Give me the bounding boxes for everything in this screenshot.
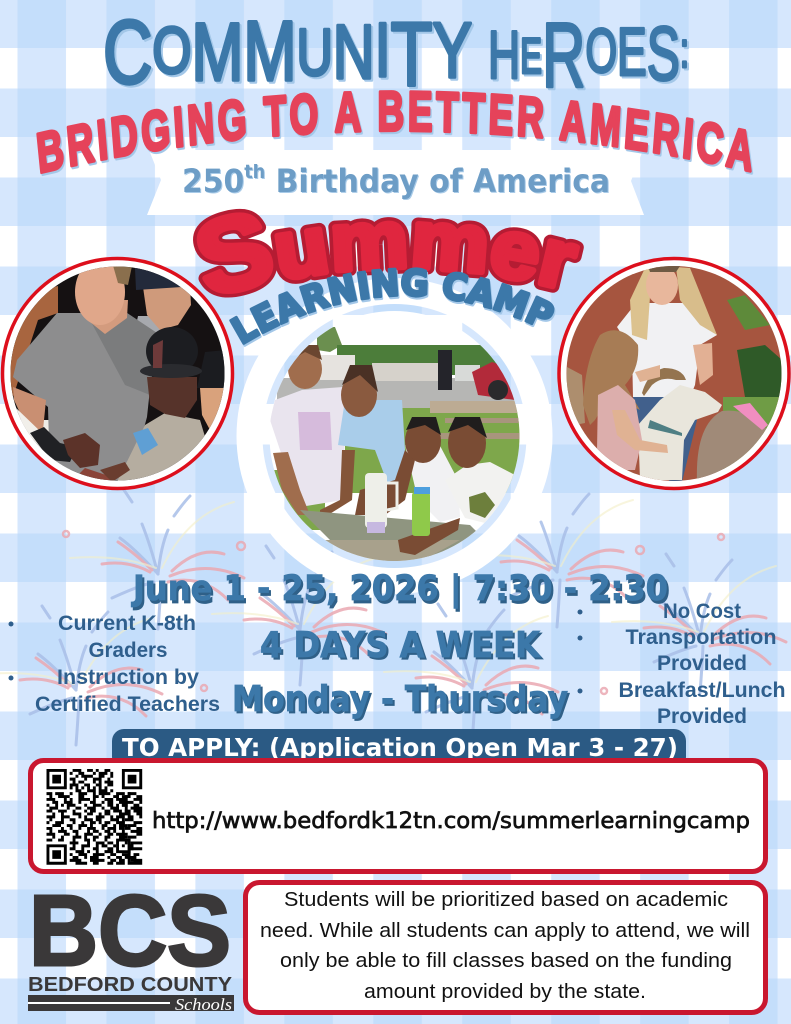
main title: Community Heroes: O: [585, 17, 617, 86]
prioritization note: amount provided by the state.: [364, 980, 646, 1003]
url text: http://www.bedfordk12tn.com/summerlearningcamp: [152, 809, 750, 834]
photo: four children at picnic table: [265, 305, 525, 570]
date and time: June 1 - 25, 2026 | 7:30 - 2:30: [131, 569, 668, 609]
main title: Community Heroes: [103, 3, 689, 107]
QR code: [46, 769, 142, 865]
main title: Community Heroes: R: [542, 5, 585, 107]
left bullet list: Certified Teachers: [35, 693, 220, 716]
main title: Community Heroes: S: [647, 12, 680, 97]
days of week: Monday - Thursday: [232, 679, 568, 720]
heading: Summer: Summer: [196, 212, 580, 294]
ribbon text: 250th Birthday of America: th: [244, 161, 265, 183]
BCS logo: BCS: [29, 875, 231, 987]
white ring behind center photo: [236, 278, 552, 594]
left bullet list: Current K-8th: [58, 612, 196, 635]
right bullet list: Provided: [657, 705, 747, 728]
main title: Community Heroes: N: [333, 10, 375, 95]
ribbon text: 250th Birthday of America: 250: [182, 162, 249, 200]
main title: Community Heroes: E: [520, 28, 542, 84]
prioritization note: [246, 882, 766, 1012]
white ribbon banner: [147, 150, 644, 215]
main title: Community Heroes: I: [375, 8, 391, 93]
left bullet list: Graders: [88, 639, 168, 662]
ribbon text: 250th Birthday of America: Birthday of America: [265, 162, 610, 200]
right bullet list: Transportation: [626, 626, 776, 649]
prioritization note: Students will be prioritized based on academic: [284, 888, 728, 911]
left bullet list: [8, 612, 220, 716]
main title: Community Heroes: U: [297, 15, 333, 89]
subtitle: Bridging to a Better America: BRIDGING TO A BETTER AMERICA: [36, 90, 754, 176]
main title: Community Heroes: H: [488, 17, 520, 93]
right bullet list: Breakfast/Lunch: [618, 679, 786, 702]
prioritization note: need. While all students can apply to attend, we will: [260, 919, 750, 942]
main title: Community Heroes: Y: [432, 6, 472, 94]
prioritization note: only be able to fill classes based on the funding: [280, 949, 732, 972]
main title: Community Heroes: O: [152, 13, 191, 87]
photo: firefighters and kids: [0, 258, 240, 490]
main title: Community Heroes: :: [680, 22, 689, 78]
url box: [30, 760, 766, 872]
BCS logo: BEDFORD COUNTY: [28, 973, 232, 996]
right bullet list: No Cost: [663, 600, 741, 623]
main title: Community Heroes: T: [391, 5, 432, 105]
fireworks decoration: [0, 488, 786, 745]
left bullet list: Instruction by: [57, 666, 199, 689]
apply banner: TO APPLY: (Application Open Mar 3 - 27): [122, 733, 678, 762]
main title: Community Heroes: M: [191, 7, 243, 98]
heading: Learning Camp: LEARNING CAMP: [229, 267, 556, 347]
BCS logo: Schools: [175, 995, 232, 1014]
photo: woman and child with goat: [559, 258, 790, 490]
heading: Summer: Summer: [193, 208, 584, 298]
main title: Community Heroes: C: [103, 3, 152, 103]
main title: Community Heroes: M: [243, 4, 297, 98]
days per week: 4 DAYS A WEEK: [260, 625, 541, 666]
heading: Summer: [193, 208, 584, 298]
right bullet list: Provided: [657, 652, 747, 675]
right bullet list: [578, 600, 786, 728]
main title: Community Heroes: E: [617, 14, 647, 90]
